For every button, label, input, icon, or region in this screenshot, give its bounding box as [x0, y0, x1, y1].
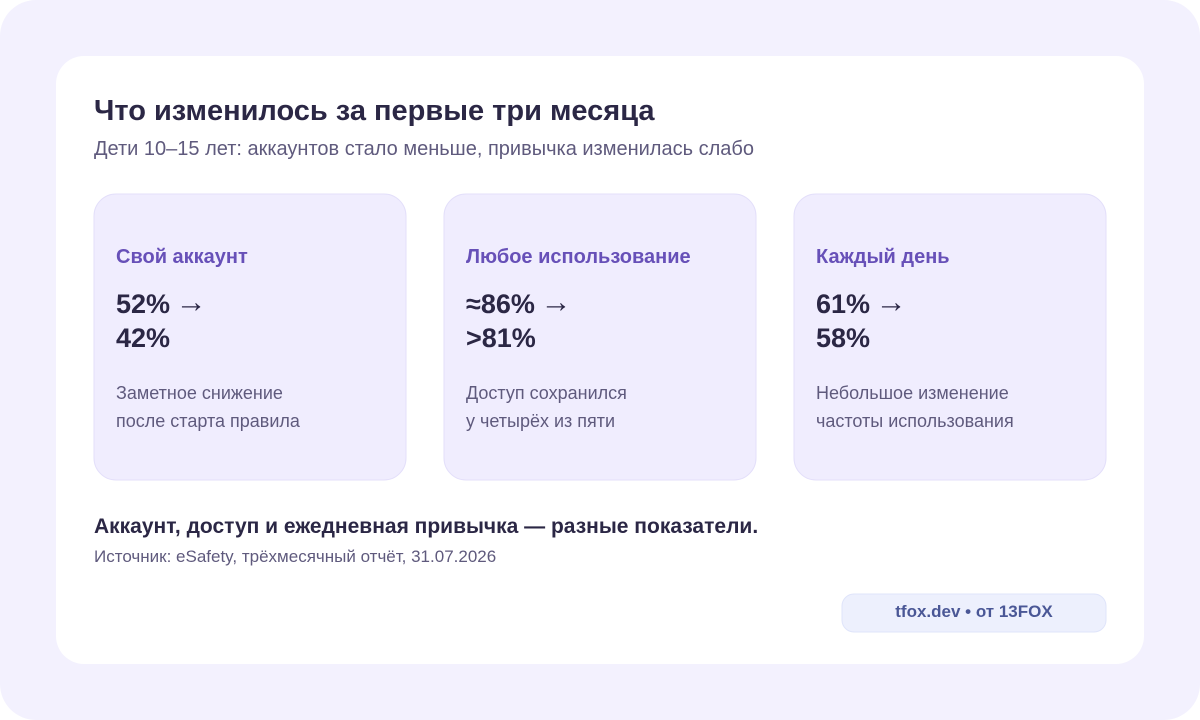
main panel — [56, 56, 1144, 664]
card description: Небольшое изменение — [816, 383, 1009, 403]
card description: у четырёх из пяти — [466, 411, 615, 431]
conclusion: Аккаунт, доступ и ежедневная привычка — разные показатели. — [94, 515, 758, 538]
card figures — [466, 284, 571, 353]
card description: частоты использования — [816, 411, 1014, 431]
card description: Доступ сохранился — [466, 383, 627, 403]
panel: own account — [94, 194, 406, 480]
card label: Свой аккаунт — [116, 246, 248, 268]
panel: any use — [444, 194, 756, 480]
card description: Заметное снижение — [116, 383, 283, 403]
panel: every day — [794, 194, 1106, 480]
card figures: 61% → — [816, 284, 907, 319]
card label: Каждый день — [816, 246, 950, 268]
card figures — [116, 284, 207, 353]
card description: после старта правила — [116, 411, 300, 431]
title: Что изменилось за первые три месяца — [94, 95, 655, 127]
card description — [116, 383, 300, 431]
source: Источник: eSafety, трёхмесячный отчёт, 31.07.2026 — [94, 547, 496, 566]
card figures — [816, 284, 907, 353]
card label: Любое использование — [466, 246, 691, 268]
card figures: ≈86% → — [466, 284, 571, 319]
card figures: 58% — [816, 323, 870, 353]
badge text: tfox.dev • от 13FOX — [895, 602, 1053, 621]
card figures: 52% → — [116, 284, 207, 319]
brand badge — [842, 594, 1106, 632]
subtitle: Дети 10–15 лет: аккаунтов стало меньше, привычка изменилась слабо — [94, 138, 754, 160]
card description — [816, 383, 1014, 431]
card figures: >81% — [466, 323, 536, 353]
card description — [466, 383, 627, 431]
card figures: 42% — [116, 323, 170, 353]
